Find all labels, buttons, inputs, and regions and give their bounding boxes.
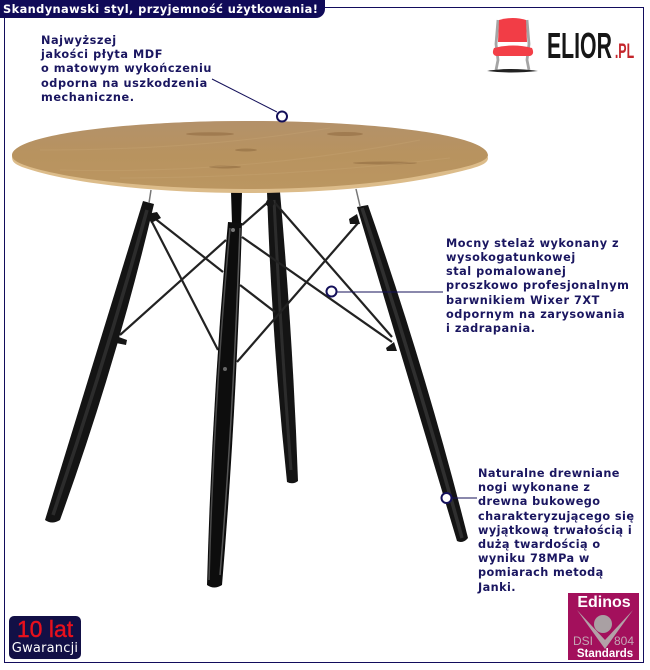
callout text: frame: proszkowo profesjonalnym	[446, 279, 629, 292]
callout text: legs: wyjątkową trwałością i	[478, 524, 632, 537]
callout text: legs: drewna bukowego	[478, 495, 600, 508]
table top	[12, 121, 488, 193]
back leg	[231, 192, 298, 483]
logo: red chair icon	[487, 18, 538, 72]
warranty badge: Gwarancji	[12, 641, 78, 656]
callout text: frame: barwnikiem Wixer 7XT	[446, 294, 600, 307]
front centre leg	[207, 222, 242, 588]
callout text: table top: o matowym wykończeniu	[41, 62, 212, 75]
callout text: legs: charakteryzującego się	[478, 510, 634, 523]
callout text: legs: wyniku 78MPa w	[478, 552, 590, 565]
left leg	[45, 201, 154, 522]
header banner: Skandynawski styl, przyjemność użytkowania!	[3, 2, 318, 16]
callout text: legs: dużą twardością o	[478, 538, 601, 551]
steel rods under table top	[149, 189, 360, 206]
callout text: table top: jakości płyta MDF	[41, 48, 163, 61]
callout text: frame: stal pomalowanej	[446, 265, 566, 278]
callout text: frame	[446, 236, 629, 335]
Edinos standards badge: Edinos	[577, 594, 631, 611]
callout text: table top: Najwyższej	[41, 34, 117, 47]
callout text: legs	[477, 467, 634, 594]
Edinos standards badge: 804	[614, 634, 634, 648]
callout text: legs: pomiarach metodą	[478, 566, 604, 579]
bolts on braces	[116, 199, 397, 351]
Edinos standards badge: DSI	[573, 634, 593, 648]
warranty badge	[9, 616, 81, 659]
warranty badge: 10 lat	[17, 616, 73, 642]
callout text: frame: wysokogatunkowej	[446, 251, 576, 264]
callout text: table top	[40, 34, 212, 104]
callout text: legs: Janki.	[478, 581, 516, 594]
callout text: table top: mechaniczne.	[41, 91, 135, 104]
callout text: frame: Mocny stelaż wykonany z	[446, 236, 619, 250]
steel cross braces	[120, 203, 392, 362]
Edinos standards badge: Standards	[577, 648, 633, 660]
callout text: table top: odporna na uszkodzenia	[41, 77, 208, 90]
logo: wordmark: ELIOR.PL	[547, 24, 634, 66]
Edinos standards badge	[568, 593, 639, 660]
callout text: frame: i zadrapania.	[446, 322, 536, 335]
callout text: frame: odpornym na zarysowania	[446, 308, 625, 321]
right leg	[357, 205, 468, 542]
callout text: legs: nogi wykonane z	[478, 481, 590, 494]
callout text: legs: Naturalne drewniane	[478, 467, 620, 480]
